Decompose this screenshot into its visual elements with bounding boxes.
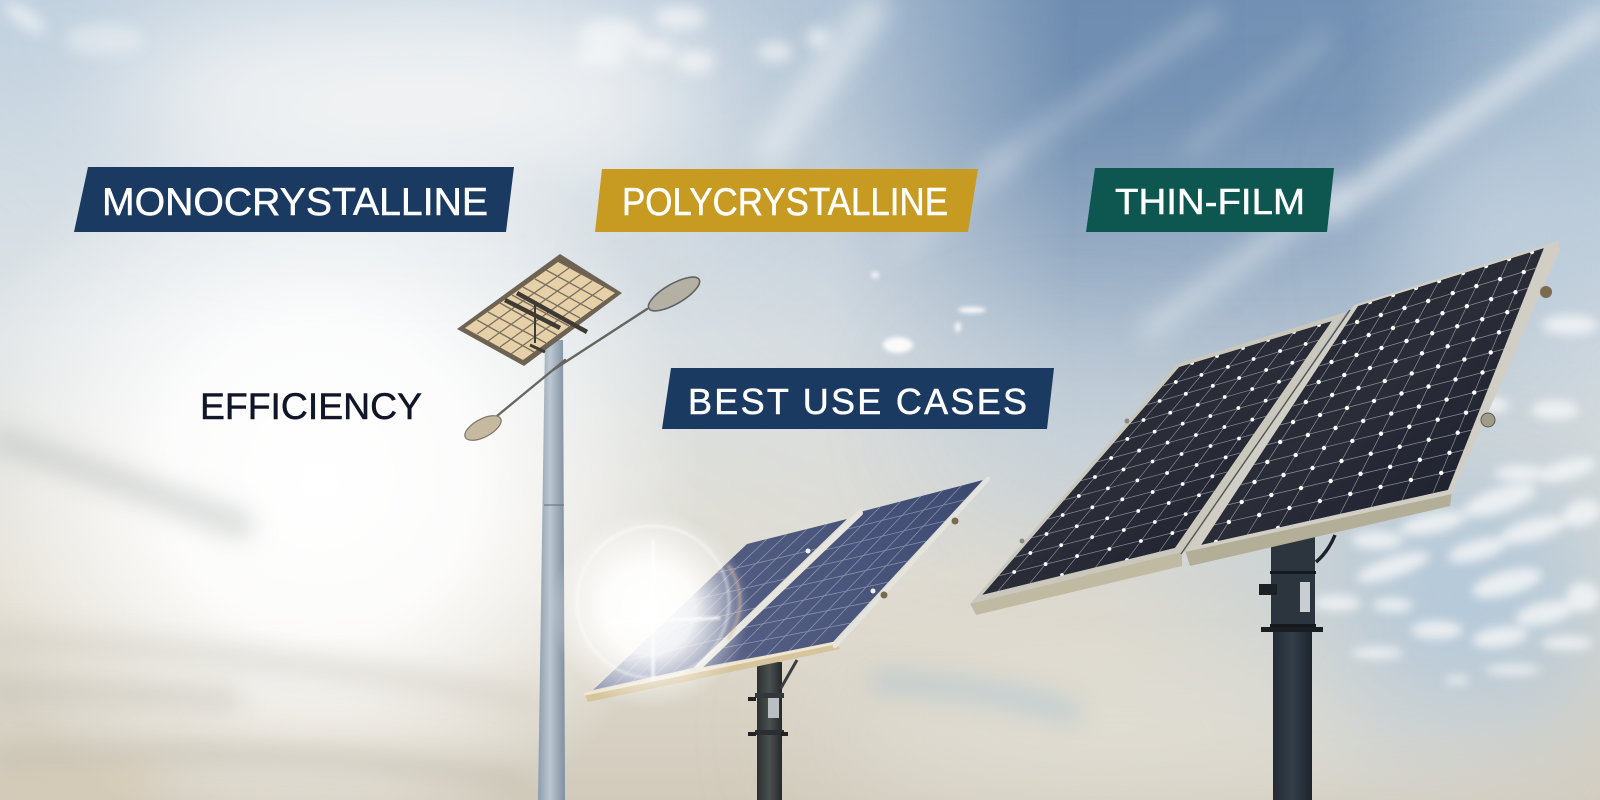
- label: polycrystalline: POLYCRYSTALLINE: [622, 181, 948, 224]
- lower lamp head: [461, 411, 505, 445]
- right panel bolts: [1020, 286, 1552, 544]
- middle pole: [748, 660, 797, 800]
- lamp pole: [538, 340, 565, 800]
- label: thin-film: THIN-FILM: [1115, 181, 1305, 222]
- label: monocrystalline: MONOCRYSTALLINE: [102, 181, 488, 224]
- lamp arms: [497, 309, 647, 416]
- left module cells: [982, 321, 1332, 595]
- label: monocrystalline: [74, 167, 514, 232]
- right module cells: [1201, 248, 1544, 545]
- label: best use cases: [662, 368, 1054, 429]
- middle solar panel: [584, 479, 988, 800]
- upper lamp head: [644, 271, 704, 317]
- sun flare: [550, 510, 750, 710]
- lamp solar panel: [457, 254, 622, 366]
- middle panel bolts: [806, 518, 958, 598]
- middle panel frame: [585, 479, 988, 695]
- label: best use cases: BEST USE CASES: [688, 381, 1027, 422]
- label: efficiency: EFFICIENCY: [200, 386, 422, 427]
- frames: [1185, 241, 1560, 552]
- label: polycrystalline: [595, 169, 978, 232]
- right panel frame side: [1185, 492, 1452, 566]
- label: thin-film: [1086, 168, 1334, 232]
- middle panel rails: [585, 479, 988, 694]
- right solar panel: [970, 241, 1560, 800]
- middle panel cells: [593, 480, 983, 690]
- lamp post with small solar panel: [457, 254, 704, 800]
- right pole: [1259, 535, 1335, 800]
